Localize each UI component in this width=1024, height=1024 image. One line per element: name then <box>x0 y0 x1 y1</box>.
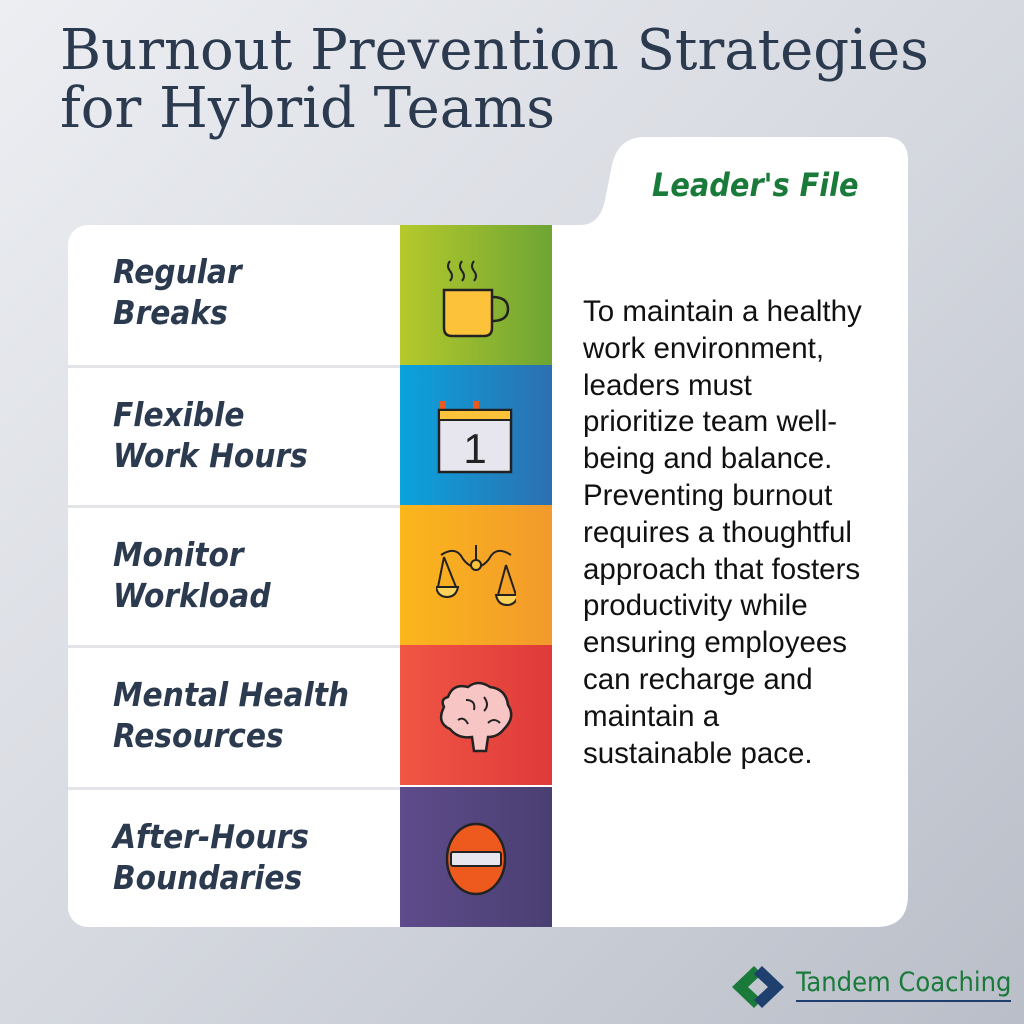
text block: can recharge and <box>583 663 813 696</box>
icon strip: stop <box>400 787 552 927</box>
row: regular breaks <box>68 225 400 365</box>
title: Burnout Prevention Strategies <box>60 18 929 83</box>
row: monitor workload <box>68 505 400 645</box>
icon strip: brain <box>400 645 552 785</box>
text block: productivity while <box>583 589 808 622</box>
icon strip: coffee <box>400 225 552 365</box>
title <box>60 18 929 141</box>
text block: sustainable pace. <box>583 737 813 770</box>
row: mental health: Mental Health <box>113 675 349 714</box>
row: monitor workload: Workload <box>113 576 271 615</box>
row: flexible hours <box>68 365 400 505</box>
text block: requires a thoughtful <box>583 516 852 549</box>
text block: maintain a <box>583 700 719 733</box>
row: flexible hours: Flexible <box>113 395 244 434</box>
row: mental health <box>68 645 400 785</box>
text block <box>583 295 862 770</box>
text block: To maintain a healthy <box>583 295 862 328</box>
row: flexible hours: Work Hours <box>113 436 308 475</box>
row: monitor workload: Monitor <box>113 535 244 574</box>
row: after-hours <box>68 787 400 927</box>
icon strip: calendar <box>400 365 552 505</box>
row: regular breaks: Regular <box>113 252 242 291</box>
text block: being and balance. <box>583 442 832 475</box>
icon strip: calendar: 1 <box>463 425 487 472</box>
icon strip: scales <box>400 505 552 645</box>
text block: work environment, <box>583 332 824 365</box>
text block: prioritize team well- <box>583 405 837 438</box>
row: after-hours: After-Hours <box>113 817 309 856</box>
logo: Tandem Coaching <box>796 967 1011 998</box>
text block: approach that fosters <box>583 553 860 586</box>
row: after-hours: Boundaries <box>113 858 302 897</box>
row: regular breaks: Breaks <box>113 293 228 332</box>
text block: leaders must <box>583 369 752 402</box>
text block: Preventing burnout <box>583 479 832 512</box>
row: mental health: Resources <box>113 716 284 755</box>
title: for Hybrid Teams <box>60 76 555 141</box>
text block: ensuring employees <box>583 626 847 659</box>
tab heading: Leader's File <box>652 166 859 204</box>
logo <box>732 966 1011 1008</box>
